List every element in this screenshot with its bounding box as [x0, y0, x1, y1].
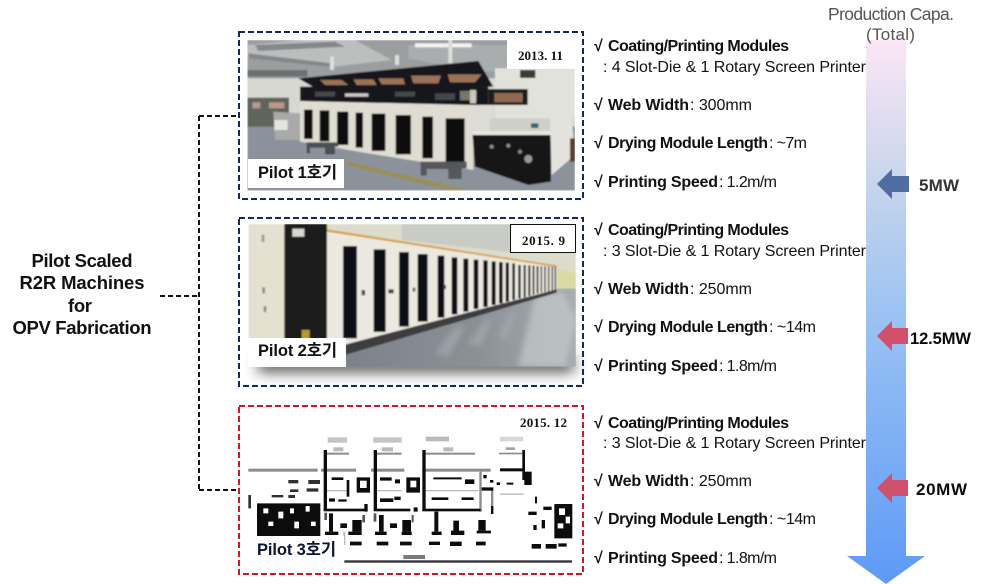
panel: Pilot 3 machine [239, 406, 583, 574]
text block: Pilot 3 specifications: Drying Module Length [608, 511, 768, 528]
text block: Pilot 2 specifications: √ [594, 222, 603, 239]
heading: left title: OPV Fabrication [12, 317, 152, 338]
arrow: 20MW marker [877, 473, 908, 503]
arrow: 5MW marker [877, 169, 909, 199]
heading: left title: Pilot Scaled [32, 250, 132, 271]
text block: Pilot 3 specifications: √ [594, 415, 603, 432]
text block: Pilot 1 specifications: √ [594, 135, 603, 152]
text block: Pilot 2 specifications: Drying Module Length [608, 319, 768, 336]
text block: Pilot 1 specifications: Coating/Printing Modules [608, 38, 789, 55]
panel frame [239, 32, 583, 199]
panel frame [239, 406, 583, 574]
text block: Pilot 2 specifications: : 250mm [690, 281, 752, 298]
text block: Pilot 2 specifications: √ [594, 319, 603, 336]
text block: Pilot 1 specifications: Drying Module Length [608, 135, 768, 152]
text block: Pilot 3 specifications: Web Width [608, 473, 689, 490]
heading: left title: for [68, 295, 92, 316]
text block: Pilot 3 specifications: Coating/Printing Modules [608, 415, 789, 432]
heading: production capacity: Production Capa. [828, 4, 954, 24]
label: 5MW: 5MW [919, 176, 960, 195]
machine label [248, 536, 344, 566]
panel: Pilot 2 machine [239, 218, 583, 386]
panel: Pilot 1 machine [239, 32, 583, 199]
photo: Pilot 1 machine [247, 40, 575, 191]
text block: Pilot 3 specifications: √ [594, 473, 603, 490]
machine label [248, 338, 346, 367]
text block: Pilot 2 specifications: √ [594, 281, 603, 298]
text block: Pilot 2 specifications: Web Width [608, 281, 689, 298]
text block: Pilot 2 specifications: Printing Speed [608, 358, 718, 375]
text block: Pilot 3 specifications [594, 415, 867, 567]
arrow: 12.5MW marker [877, 321, 908, 351]
text block: Pilot 1 specifications: : 300mm [690, 97, 752, 114]
text block: Pilot 1 specifications: Printing Speed [608, 174, 718, 191]
date badge [510, 224, 576, 252]
label: 12.5MW: 12.5MW [910, 330, 971, 348]
text block: Pilot 1 specifications: √ [594, 38, 603, 55]
machine label [248, 159, 344, 188]
text block: Pilot 3 specifications: : ~14m [769, 511, 816, 528]
panel frame [239, 218, 583, 386]
machine label: Pilot 2호기 [258, 341, 337, 360]
text block: Pilot 2 specifications: : 3 Slot-Die & 1 Rotary Screen Printer [603, 243, 867, 260]
text block: Pilot 1 specifications: √ [594, 97, 603, 114]
label: 20MW: 20MW [916, 480, 968, 499]
text block: Pilot 3 specifications: √ [594, 511, 603, 528]
date badge [507, 40, 575, 69]
date text: 2015. 12 [520, 415, 567, 430]
arrow: production capacity gradient [847, 40, 925, 584]
machine label: Pilot 1호기 [258, 163, 337, 182]
text block: Pilot 3 specifications: √ [594, 550, 603, 567]
date badge: 2015. 9 [522, 233, 566, 248]
photo shadow [258, 358, 574, 372]
text block: Pilot 1 specifications: √ [594, 174, 603, 191]
connector: dashed bracket [160, 116, 238, 490]
text block: Pilot 3 specifications: : 1.8m/m [719, 550, 777, 567]
photo: Pilot 2 machine [248, 224, 576, 370]
text block: Pilot 2 specifications: √ [594, 358, 603, 375]
heading: production capacity [828, 4, 954, 44]
text block: Pilot 2 specifications: : 1.8m/m [719, 358, 777, 375]
heading: left title [12, 250, 152, 338]
text block: Pilot 1 specifications: Web Width [608, 97, 689, 114]
text block: Pilot 2 specifications: : ~14m [769, 319, 816, 336]
heading: left title: R2R Machines [20, 272, 144, 293]
diagram: Pilot 3 schematic [248, 437, 572, 563]
text block: Pilot 3 specifications: : 250mm [690, 473, 752, 490]
text block: Pilot 1 specifications: : ~7m [769, 135, 807, 152]
text block: Pilot 3 specifications: : 3 Slot-Die & 1 Rotary Screen Printer [603, 435, 867, 452]
text block: Pilot 1 specifications: : 4 Slot-Die & 1 Rotary Screen Printer [603, 59, 867, 76]
text block: Pilot 1 specifications [594, 38, 867, 191]
heading: production capacity: (Total) [866, 25, 915, 44]
text block: Pilot 2 specifications: Coating/Printing Modules [608, 222, 789, 239]
date badge: 2013. 11 [518, 48, 563, 63]
text block: Pilot 1 specifications: : 1.2m/m [719, 174, 777, 191]
text block: Pilot 2 specifications [594, 222, 867, 375]
machine label: Pilot 3호기 [257, 540, 336, 559]
text block: Pilot 3 specifications: Printing Speed [608, 550, 718, 567]
